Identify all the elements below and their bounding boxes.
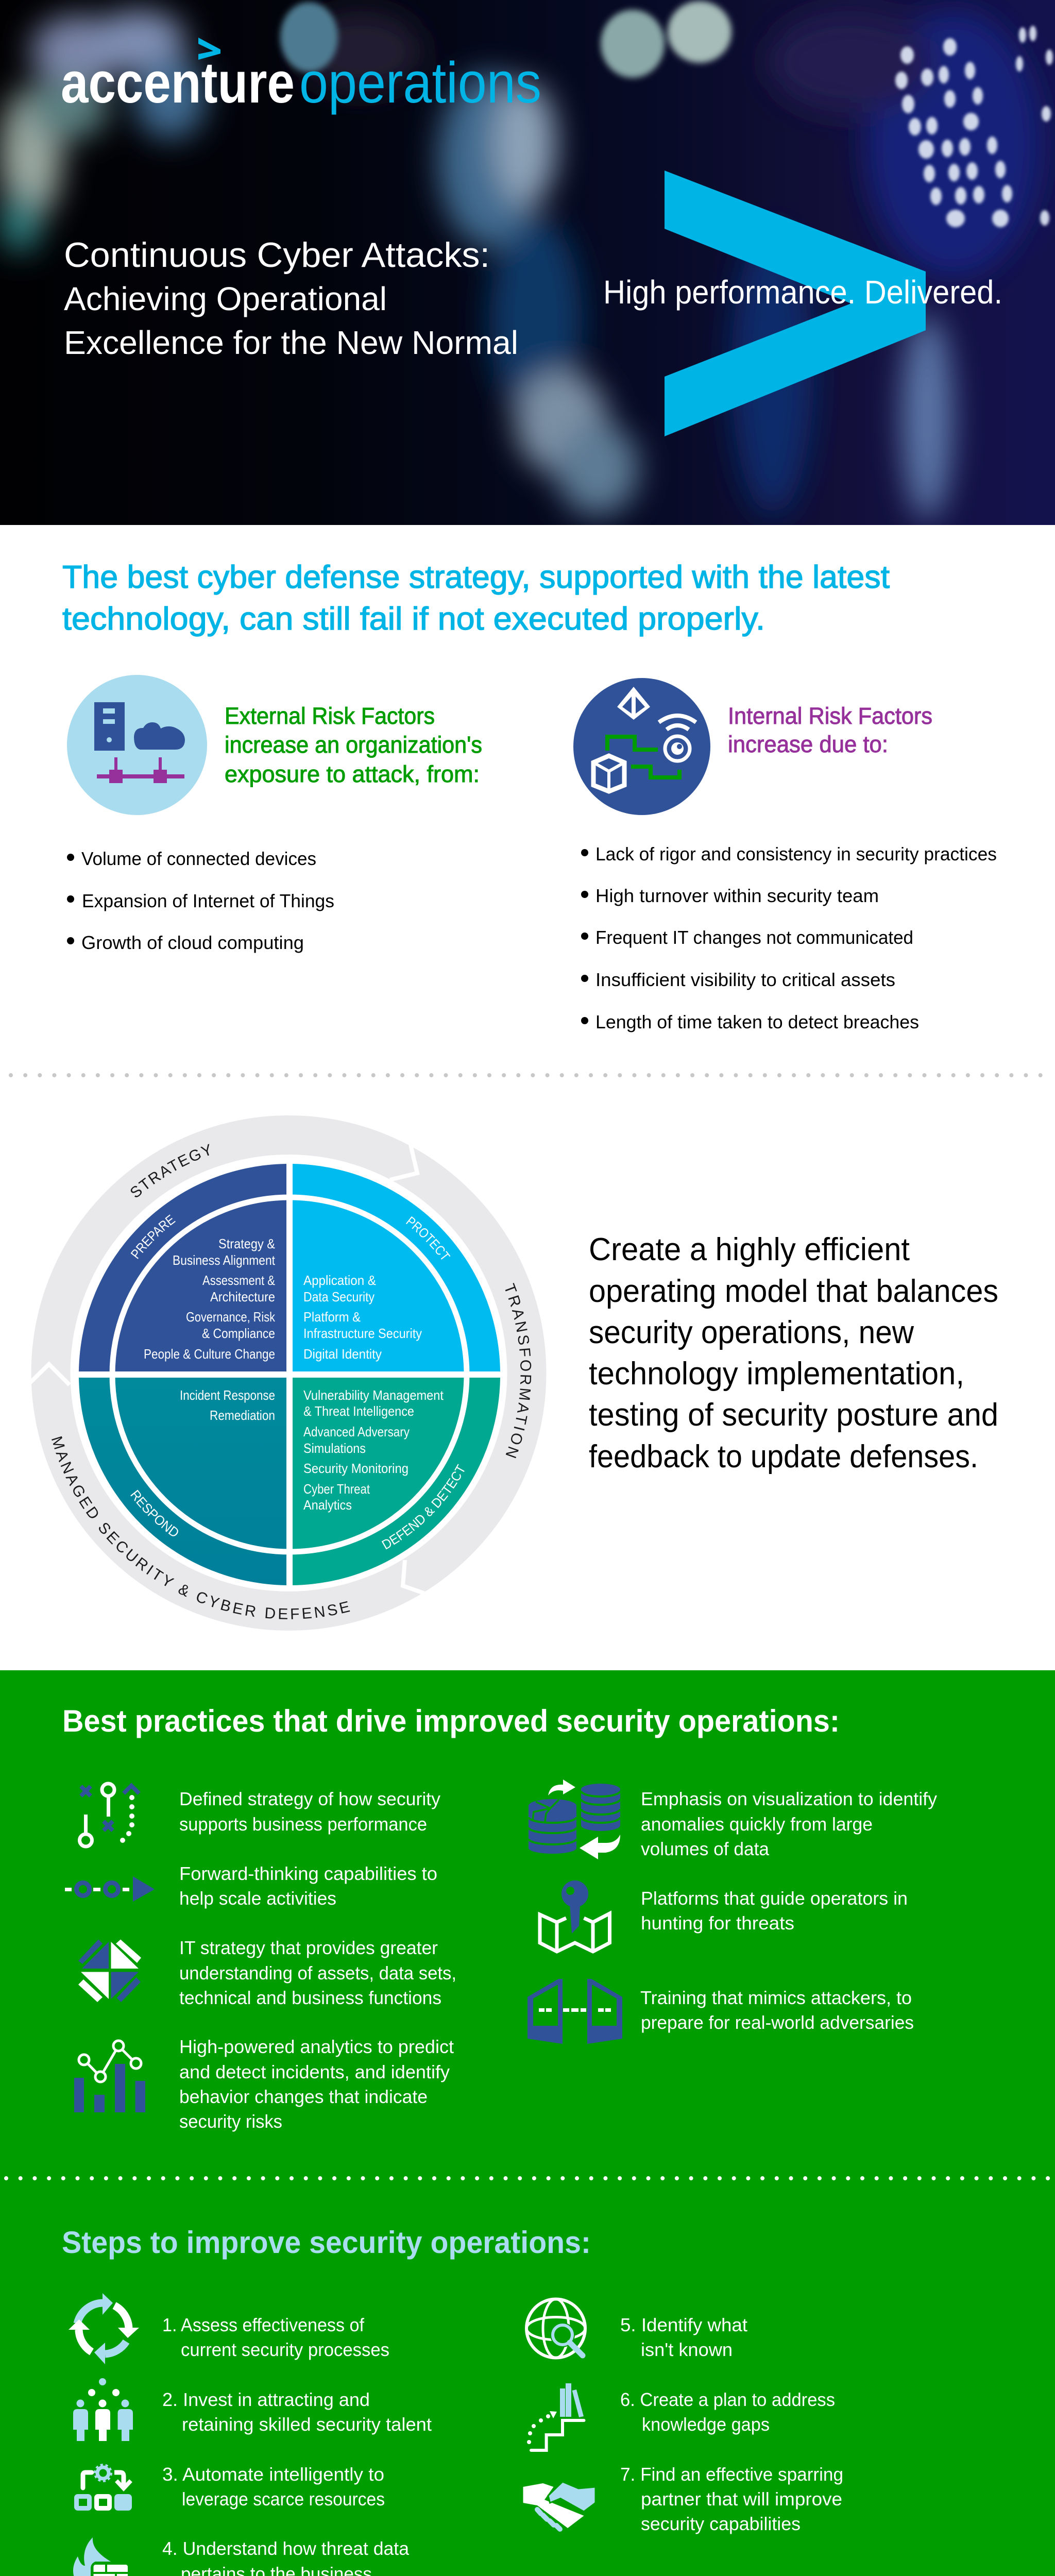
text: step 7 — [620, 2464, 843, 2534]
defend and detect items: Cyber Threat — [303, 1481, 370, 1497]
icon: automation — [74, 2465, 132, 2511]
icon: cycle arrows — [69, 2293, 139, 2364]
ring labels: MANAGED SECURITY & CYBER DEFENSE — [52, 1436, 350, 1619]
text: analytics: behavior changes that indicate — [179, 2086, 428, 2107]
quadrant labels — [130, 1214, 465, 1550]
icon: databases — [529, 1780, 620, 1859]
text: step 3 — [162, 2464, 385, 2510]
intro heading: The best cyber defense strategy, supported with the latest — [62, 560, 890, 595]
text: step 2 — [162, 2389, 432, 2435]
text: step 1 — [162, 2314, 389, 2360]
protect items: Application & — [303, 1273, 376, 1288]
internal risk list: Length of time taken to detect breaches — [595, 1011, 919, 1032]
internal risk list — [581, 843, 997, 1032]
internal risk heading: Internal Risk Factors — [728, 703, 932, 729]
text block: operating model: testing of security posture and — [589, 1397, 998, 1433]
icon: globe search — [526, 2299, 585, 2358]
text block: operating model: Create a highly efficient — [589, 1232, 910, 1267]
logo: accenture operations — [61, 38, 541, 115]
text: it strategy: understanding of assets, data sets, — [179, 1962, 456, 1984]
text: it strategy: technical and business functions — [179, 1987, 441, 2008]
defend and detect items: Simulations — [303, 1440, 366, 1456]
protect items — [303, 1273, 422, 1362]
text: analytics: High-powered analytics to predict — [179, 2036, 454, 2057]
logo: accenture operations: accenture — [61, 50, 295, 115]
text: step 2: retaining skilled security talent — [182, 2414, 432, 2435]
icon: strategy play — [79, 1784, 139, 1846]
text: analytics: and detect incidents, and identify — [179, 2061, 450, 2082]
defend and detect items: & Threat Intelligence — [303, 1403, 414, 1419]
steps heading: Steps to improve security operations: — [62, 2225, 591, 2260]
logo: accenture operations: operations — [299, 50, 541, 115]
text: step 7: partner that will improve — [641, 2488, 842, 2510]
protect items: Digital Identity — [303, 1346, 382, 1362]
text: step 2: 2. Invest in attracting and — [162, 2389, 370, 2410]
internal risk list: Frequent IT changes not communicated — [595, 927, 913, 948]
text: defined strategy — [179, 1788, 440, 1835]
text: step 7: security capabilities — [641, 2513, 801, 2534]
text: it strategy: IT strategy that provides greater — [179, 1937, 438, 1958]
icon: books and stairs — [527, 2383, 584, 2450]
external risk heading: exposure to attack, from: — [225, 761, 480, 787]
text block: operating model: technology implementation, — [589, 1356, 964, 1392]
text block: operating model — [589, 1232, 998, 1475]
icon: analytics chart — [74, 2041, 145, 2112]
text: visualization: Emphasis on visualization to identify — [641, 1788, 937, 1809]
ring labels: TRANSFORMATION — [505, 1283, 532, 1458]
text: platforms: Platforms that guide operators in — [641, 1888, 908, 1909]
external risk heading — [225, 703, 482, 787]
ring labels — [52, 1144, 532, 1619]
tagline: High performance. Delivered. — [603, 274, 1002, 311]
blurred LED dots — [895, 26, 1053, 227]
title: Excellence for the New Normal — [64, 324, 518, 361]
panel: risk factors — [9, 560, 1043, 1631]
prepare items: Architecture — [210, 1289, 275, 1304]
panel: hero banner — [0, 0, 1055, 525]
external risk list: Volume of connected devices — [81, 848, 316, 869]
text: step 6: 6. Create a plan to address — [620, 2389, 835, 2410]
defend and detect items — [303, 1387, 444, 1513]
icon: large chevron — [665, 171, 926, 436]
internal risk list: High turnover within security team — [595, 885, 879, 906]
text: platforms — [641, 1888, 908, 1934]
prepare items: Strategy & — [218, 1236, 275, 1251]
text: step 4: 4. Understand how threat data — [162, 2538, 410, 2559]
quadrant: prepare — [79, 1164, 286, 1371]
icon: mirrored devices — [528, 1979, 622, 2044]
quadrant labels: RESPOND — [130, 1490, 178, 1536]
outer ring — [50, 1135, 526, 1611]
text block: operating model: security operations, new — [589, 1315, 914, 1350]
text: forward-thinking: help scale activities — [179, 1888, 336, 1909]
text: step 6 — [620, 2389, 835, 2435]
prepare items: Assessment & — [202, 1273, 275, 1288]
text: defined strategy: Defined strategy of how security — [179, 1788, 440, 1809]
text: it strategy — [179, 1937, 456, 2008]
quadrant: respond — [79, 1378, 286, 1585]
text: step 3: leverage scarce resources — [182, 2488, 385, 2510]
quadrant labels: PROTECT — [406, 1216, 450, 1260]
title: Continuous Cyber Attacks: — [64, 235, 490, 275]
quadrant: defend and detect — [293, 1378, 500, 1585]
quadrant labels: PREPARE — [131, 1214, 176, 1259]
icon: internal risk — [573, 678, 710, 815]
text: defined strategy: supports business performance — [179, 1814, 427, 1835]
icon: forward arrow — [65, 1876, 155, 1902]
best practices heading: Best practices that drive improved security operations: — [62, 1704, 840, 1738]
ring labels: STRATEGY — [131, 1144, 209, 1197]
text: visualization — [641, 1788, 937, 1859]
external risk list: Expansion of Internet of Things — [82, 890, 334, 911]
respond items: Remediation — [210, 1408, 275, 1423]
respond items: Incident Response — [180, 1387, 275, 1403]
icon: people — [73, 2378, 133, 2441]
icon: map and key — [540, 1880, 610, 1952]
text: training — [640, 1987, 914, 2033]
text: forward-thinking: Forward-thinking capabilities to — [179, 1863, 437, 1884]
text: step 5: 5. Identify what — [620, 2314, 747, 2335]
panel: best practices and steps — [0, 1670, 1055, 2576]
external risk heading: increase an organization's — [225, 732, 482, 758]
text: step 3: 3. Automate intelligently to — [162, 2464, 384, 2485]
text: training: prepare for real-world adversaries — [641, 2012, 914, 2033]
text: visualization: anomalies quickly from large — [641, 1814, 873, 1835]
protect items: Platform & — [303, 1309, 361, 1325]
text: analytics: security risks — [179, 2111, 282, 2132]
protect items: Data Security — [303, 1289, 375, 1304]
prepare items: & Compliance — [202, 1326, 275, 1341]
text: step 5: isn't known — [641, 2339, 733, 2360]
defend and detect items: Vulnerability Management — [303, 1387, 444, 1403]
icon: it strategy diamond — [78, 1939, 141, 2002]
text: step 1: current security processes — [181, 2339, 389, 2360]
internal risk heading: increase due to: — [728, 731, 888, 757]
defend and detect items: Security Monitoring — [303, 1461, 409, 1476]
internal risk list: Lack of rigor and consistency in security practices — [595, 843, 997, 865]
chart: operating model wheel — [31, 1115, 546, 1631]
text: step 1: 1. Assess effectiveness of — [162, 2314, 365, 2335]
text: platforms: hunting for threats — [641, 1912, 794, 1934]
internal risk heading — [728, 703, 932, 757]
external risk list — [67, 848, 334, 953]
text: step 6: knowledge gaps — [642, 2414, 770, 2435]
text: forward-thinking — [179, 1863, 437, 1909]
text block: operating model: feedback to update defenses. — [589, 1439, 978, 1475]
intro heading: technology, can still fail if not executed properly. — [62, 601, 765, 637]
ring arrow separators — [29, 1143, 427, 1594]
respond items — [180, 1387, 275, 1423]
hero blurred photo background — [0, 0, 1055, 525]
icon: handshake — [523, 2482, 595, 2529]
icon: external risk — [67, 675, 207, 815]
text: analytics — [179, 2036, 454, 2132]
text block: operating model: operating model that balances — [589, 1274, 998, 1309]
quadrant labels: DEFEND & DETECT — [381, 1464, 465, 1550]
text: step 7: 7. Find an effective sparring — [620, 2464, 843, 2485]
external risk heading: External Risk Factors — [225, 703, 435, 729]
prepare items — [144, 1236, 276, 1362]
internal risk list: Insufficient visibility to critical assets — [595, 969, 895, 990]
prepare items: Governance, Risk — [186, 1309, 276, 1325]
protect items: Infrastructure Security — [303, 1326, 422, 1341]
title: Achieving Operational — [64, 280, 387, 317]
icon: flame and firewall — [73, 2537, 128, 2576]
prepare items: People & Culture Change — [144, 1346, 275, 1362]
prepare items: Business Alignment — [173, 1252, 276, 1268]
external risk list: Growth of cloud computing — [81, 932, 304, 953]
title — [64, 235, 518, 361]
text: visualization: volumes of data — [641, 1838, 770, 1859]
defend and detect items: Advanced Adversary — [303, 1424, 410, 1439]
text: training: Training that mimics attackers, to — [640, 1987, 912, 2008]
text: step 5 — [620, 2314, 747, 2360]
quadrant: protect — [293, 1164, 500, 1371]
defend and detect items: Analytics — [303, 1497, 352, 1513]
text: step 4 — [162, 2538, 410, 2576]
intro heading — [62, 560, 890, 637]
